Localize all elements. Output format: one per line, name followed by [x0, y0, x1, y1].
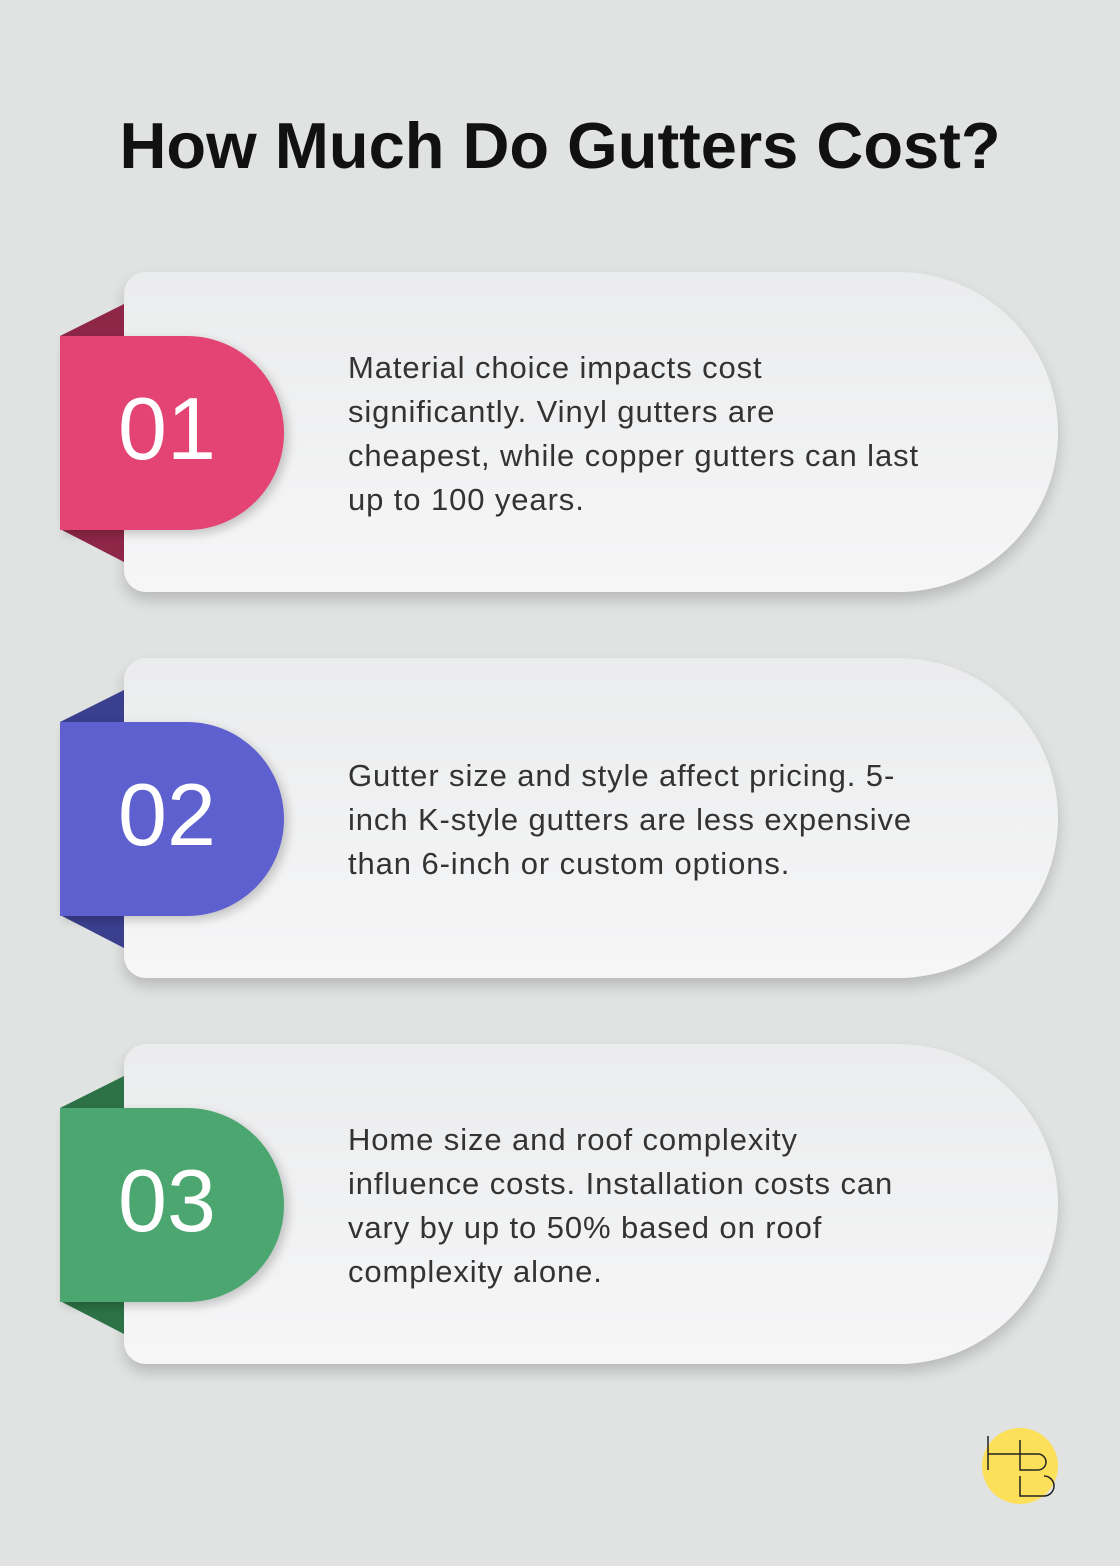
- badge 02: [60, 722, 284, 916]
- text 3: vary by up to 50% based on roof: [348, 1210, 822, 1245]
- icon: logo: [982, 1428, 1058, 1504]
- card 1: [124, 272, 1058, 592]
- card 2: [124, 658, 1058, 978]
- panel: item 2: [60, 658, 1064, 992]
- text 2: inch K-style gutters are less expensive: [348, 802, 912, 837]
- fold 3: [60, 1076, 124, 1334]
- panel: item 3: [60, 1044, 1064, 1378]
- text 3: Home size and roof complexity: [348, 1122, 798, 1157]
- text 1: Material choice impacts cost: [348, 350, 763, 385]
- badge 02: 02: [118, 765, 216, 864]
- text 1: up to 100 years.: [348, 482, 585, 517]
- text 3: complexity alone.: [348, 1254, 603, 1289]
- text 2: Gutter size and style affect pricing. 5-: [348, 758, 895, 793]
- fold 2: [60, 690, 124, 948]
- fold 1: [60, 304, 124, 562]
- title: How Much Do Gutters Cost?: [119, 109, 1001, 182]
- panel: item 1: [60, 272, 1064, 606]
- badge 01: 01: [118, 379, 216, 478]
- text 3: [348, 1122, 893, 1289]
- card 3: [124, 1044, 1058, 1364]
- text 1: cheapest, while copper gutters can last: [348, 438, 919, 473]
- text 2: than 6-inch or custom options.: [348, 846, 790, 881]
- text 2: [348, 758, 912, 881]
- text 3: influence costs. Installation costs can: [348, 1166, 893, 1201]
- badge 01: [60, 336, 284, 530]
- badge 03: 03: [118, 1151, 216, 1250]
- text 1: [348, 350, 919, 517]
- badge 03: [60, 1108, 284, 1302]
- text 1: significantly. Vinyl gutters are: [348, 394, 775, 429]
